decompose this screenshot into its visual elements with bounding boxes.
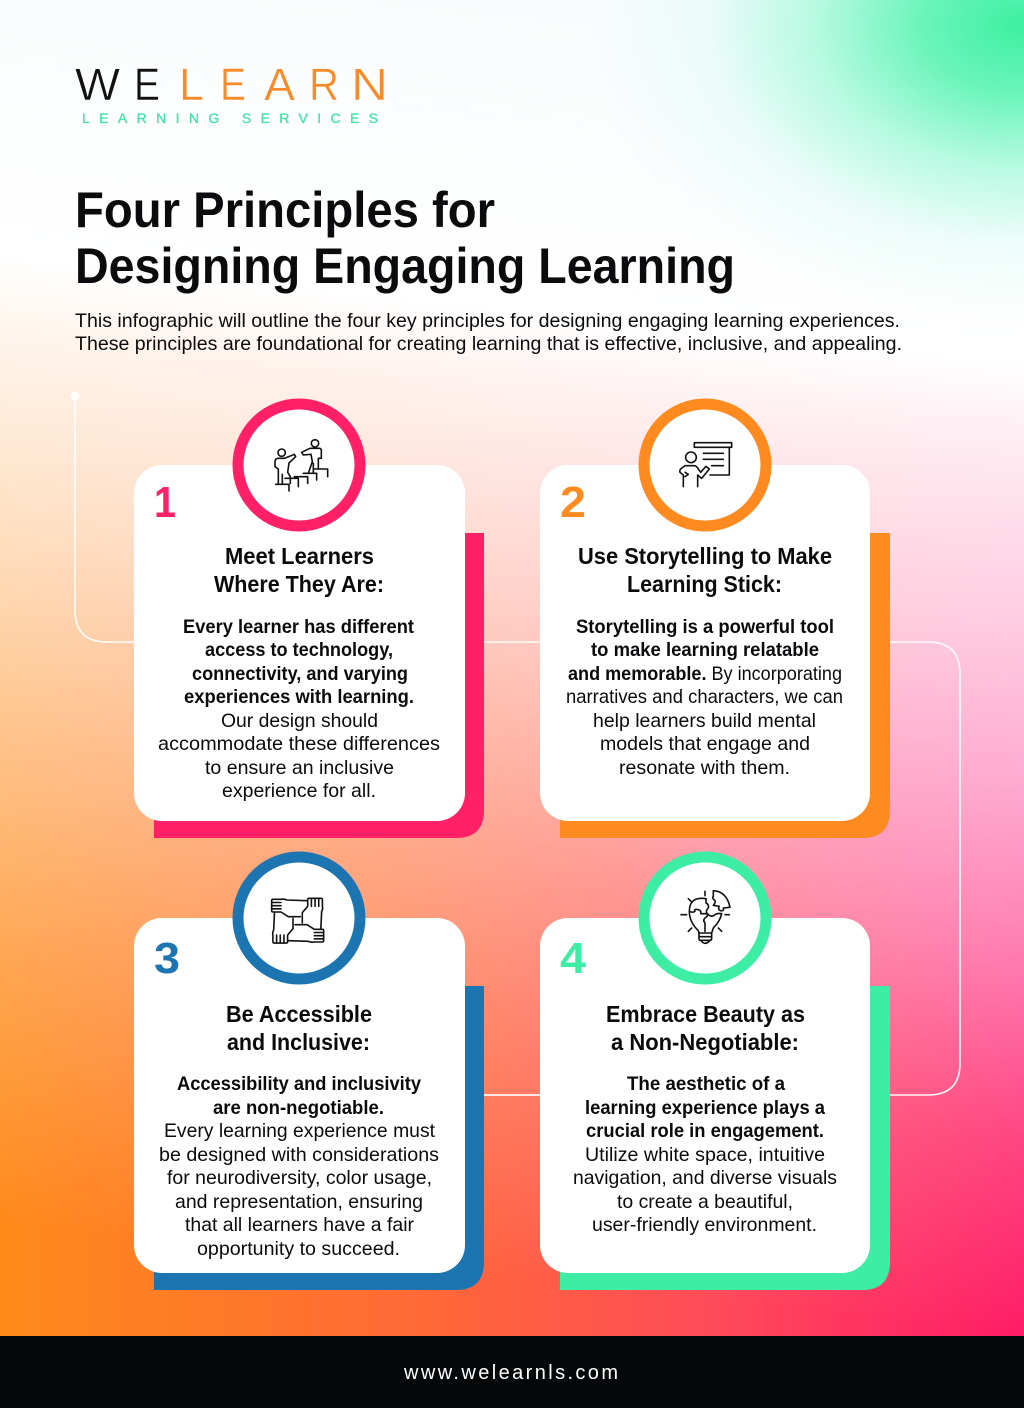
title — [75, 182, 735, 294]
body text — [159, 1073, 439, 1260]
body text: Accessibility and inclusivity — [177, 1073, 421, 1095]
body text — [566, 616, 843, 779]
body text: narratives and characters, we can — [566, 686, 843, 708]
icon ring: green — [644, 857, 766, 979]
logo word: LEARN — [179, 59, 388, 110]
panel: principle 3 — [134, 857, 484, 1290]
body text: The aesthetic of a — [627, 1073, 785, 1095]
heading: Embrace Beauty as — [606, 1001, 805, 1027]
logo word: LEARN: E — [220, 59, 246, 110]
number 1: 1 — [154, 478, 176, 527]
logo word: WE: E — [134, 59, 160, 110]
icon: puzzle light bulb — [681, 891, 730, 943]
intro text: This infographic will outline the four key principles for designing engaging learning experiences. — [75, 310, 900, 332]
icon ring: pink — [238, 404, 360, 526]
number 2: 2 — [560, 478, 586, 527]
title: Four Principles for — [75, 182, 495, 238]
heading: Use Storytelling to Make — [578, 543, 832, 569]
body text — [158, 616, 440, 802]
body text: connectivity, and varying — [192, 663, 408, 685]
logo word: WE: W — [75, 59, 121, 110]
body text: and representation, ensuring — [175, 1191, 423, 1213]
body text: to ensure an inclusive — [205, 757, 394, 779]
icon ring: blue — [238, 857, 360, 979]
body text: user-friendly environment. — [592, 1214, 817, 1236]
body text: experiences with learning. — [184, 686, 414, 708]
body text: models that engage and — [600, 733, 810, 755]
body text: Utilize white space, intuitive — [585, 1144, 825, 1166]
heading: Learning Stick: — [627, 571, 782, 597]
body text — [573, 1073, 837, 1236]
body text: resonate with them. — [619, 757, 790, 779]
connector line — [70, 392, 960, 1095]
footer bar — [0, 1336, 1024, 1408]
card backing: blue — [154, 986, 484, 1290]
logo word: LEARN: R — [309, 59, 339, 110]
panel: principle 1 — [134, 404, 484, 838]
body text: for neurodiversity, color usage, — [167, 1167, 432, 1189]
body text: to make learning relatable — [591, 639, 819, 661]
card: white — [134, 465, 465, 821]
heading — [606, 1001, 805, 1055]
logo — [75, 59, 388, 126]
heading: and Inclusive: — [227, 1029, 370, 1055]
card: white — [134, 918, 465, 1273]
heading: Be Accessible — [226, 1001, 372, 1027]
body text: be designed with considerations — [159, 1144, 439, 1166]
body text: access to technology, — [205, 639, 393, 661]
icon: four linked hands — [272, 898, 324, 943]
body text: crucial role in engagement. — [586, 1120, 824, 1142]
body text: and memorable. By incorporating — [568, 663, 842, 685]
logo word: LEARN: N — [351, 59, 388, 110]
heading: Where They Are: — [214, 571, 384, 597]
body text: Every learning experience must — [164, 1120, 436, 1142]
card backing: green — [560, 986, 890, 1290]
card: white — [540, 918, 870, 1273]
heading — [214, 543, 384, 597]
body text: navigation, and diverse visuals — [573, 1167, 837, 1189]
icon: presenter at board — [680, 443, 732, 487]
card: white — [540, 465, 870, 821]
body text: help learners build mental — [593, 710, 816, 732]
heading — [226, 1001, 372, 1055]
body text: Our design should — [221, 710, 378, 732]
intro text — [75, 310, 902, 355]
footer url: www.welearnls.com — [403, 1362, 618, 1384]
heading — [578, 543, 832, 597]
body text: Every learner has different — [183, 616, 414, 638]
icon ring: orange — [644, 404, 766, 526]
card backing: pink — [154, 533, 484, 838]
intro text: These principles are foundational for creating learning that is effective, inclusive, and appealing. — [75, 333, 902, 355]
title: Designing Engaging Learning — [75, 238, 735, 294]
heading: a Non-Negotiable: — [611, 1029, 799, 1055]
number 3: 3 — [154, 934, 180, 983]
logo word: LEARN: A — [264, 59, 295, 110]
body text: Storytelling is a powerful tool — [576, 616, 834, 638]
body text: opportunity to succeed. — [197, 1238, 400, 1260]
icon: people climbing steps — [275, 440, 328, 491]
logo tagline: LEARNING SERVICES — [82, 110, 378, 126]
card backing: orange — [560, 533, 890, 838]
heading: Meet Learners — [225, 543, 374, 569]
body text: are non-negotiable. — [213, 1097, 384, 1119]
body text: learning experience plays a — [585, 1097, 825, 1119]
logo word: LEARN: L — [179, 59, 204, 110]
number 4: 4 — [560, 934, 587, 983]
panel: principle 4 — [540, 857, 890, 1290]
logo word: WE — [75, 59, 160, 110]
body text: accommodate these differences — [158, 733, 440, 755]
body text: that all learners have a fair — [185, 1214, 414, 1236]
panel: principle 2 — [540, 404, 890, 838]
body text: to create a beautiful, — [617, 1191, 793, 1213]
body text: experience for all. — [222, 780, 376, 802]
